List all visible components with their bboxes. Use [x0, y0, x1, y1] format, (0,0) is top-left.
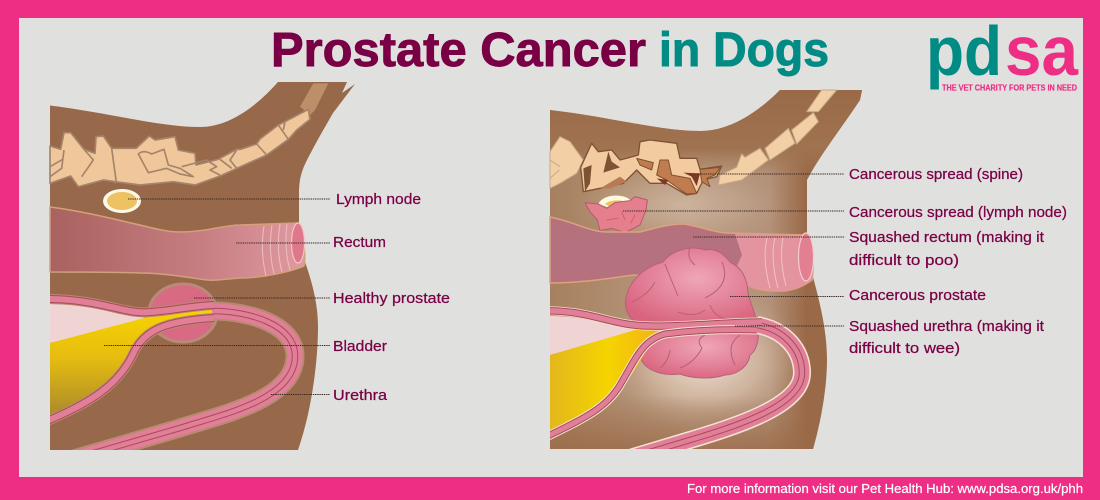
labels: dog with cancer: Squashed rectum (making it [849, 230, 1044, 246]
squashed urethra [540, 311, 802, 458]
bladder [50, 304, 212, 417]
cancerous lymph node [585, 196, 647, 233]
cancerous prostate [626, 248, 758, 378]
panel: dog with prostate cancer [540, 90, 862, 458]
rectum [50, 207, 305, 280]
logo: pdsa: sa [1005, 12, 1079, 90]
body shading [550, 90, 862, 449]
cancerous spine section [581, 140, 722, 195]
spine [50, 83, 328, 187]
panel: healthy dog anatomy [40, 82, 355, 460]
title [271, 24, 829, 77]
bladder [550, 316, 757, 431]
labels: healthy dog: Lymph node [336, 192, 421, 208]
labels: dog with cancer: Cancerous spread (spine) [849, 167, 1023, 183]
urethra [40, 299, 295, 460]
body silhouette [50, 82, 355, 450]
title: Prostate Cancer [271, 24, 646, 77]
lymph node [103, 189, 141, 213]
labels: dog with cancer: Squashed urethra (making it [849, 319, 1044, 335]
body silhouette [550, 90, 862, 449]
labels: healthy dog: Bladder [333, 339, 387, 355]
labels: dog with cancer [849, 167, 1067, 357]
squashed rectum [550, 217, 814, 291]
footer text: For more information visit our Pet Health Hub: www.pdsa.org.uk/phh [687, 481, 1083, 496]
labels: healthy dog [333, 192, 450, 404]
labels: dog with cancer: difficult to poo) [849, 253, 959, 269]
healthy spine section [550, 90, 837, 188]
logo: pdsa: THE VET CHARITY FOR PETS IN NEED [942, 82, 1077, 92]
labels: healthy dog: Rectum [333, 235, 386, 251]
title: in Dogs [659, 24, 829, 77]
logo: pdsa: pd [926, 12, 1002, 90]
healthy prostate [149, 284, 217, 342]
labels: dog with cancer: Cancerous spread (lymph node) [849, 205, 1067, 221]
labels: healthy dog: Urethra [333, 388, 388, 404]
labels: dog with cancer: Cancerous prostate [849, 288, 986, 304]
labels: dog with cancer: difficult to wee) [849, 341, 960, 357]
logo: pdsa [926, 12, 1079, 92]
labels: healthy dog: Healthy prostate [333, 291, 450, 307]
leader lines [104, 174, 844, 394]
